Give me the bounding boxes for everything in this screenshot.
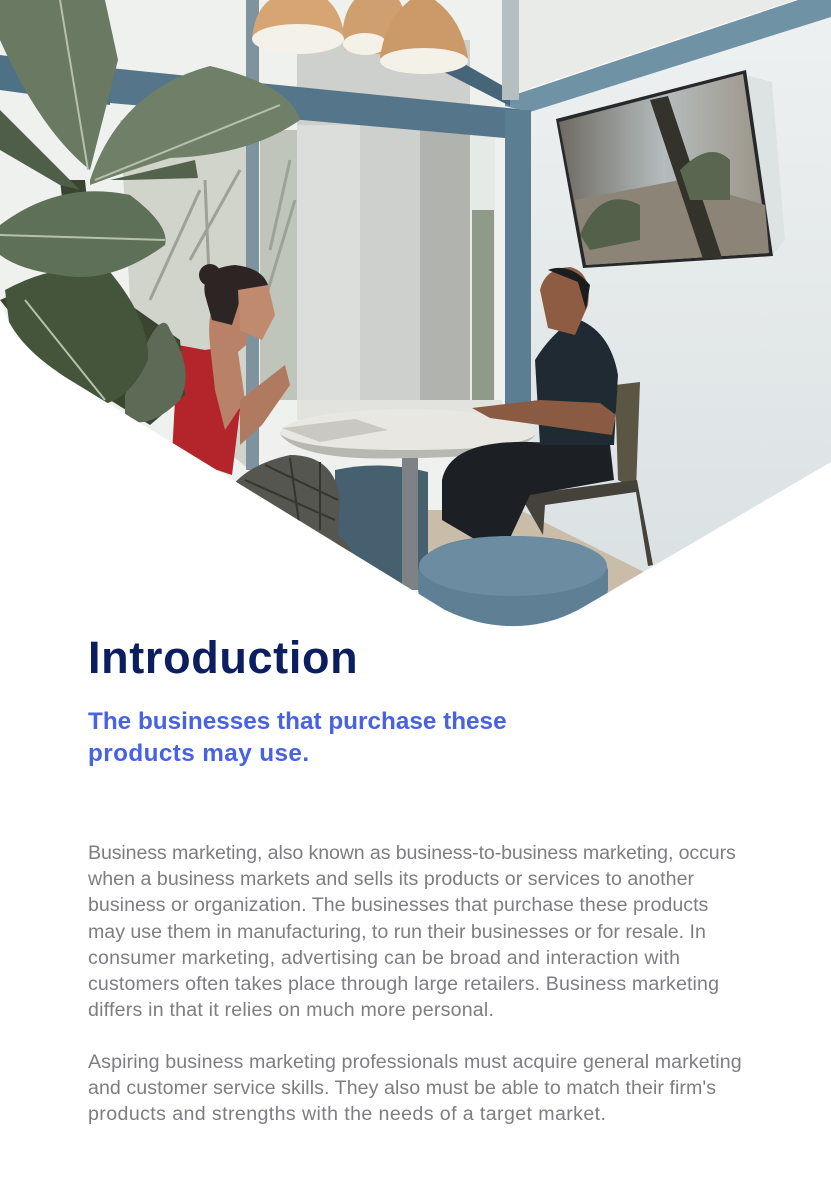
body paragraph 1: customers often takes place through large retailers. Business marketing — [88, 973, 719, 995]
title: Introduction — [88, 632, 358, 683]
TV — [556, 70, 773, 268]
pendant lamps — [252, 0, 468, 74]
concrete pillar — [297, 40, 470, 410]
window beams — [0, 55, 110, 105]
fiddle leaf plant — [0, 0, 300, 425]
man — [442, 267, 653, 566]
subtitle — [88, 708, 507, 767]
body paragraph 1: Business marketing, also known as business-to-business marketing, occurs — [88, 842, 736, 864]
subtitle: products may use. — [88, 740, 310, 767]
photo: meeting in a bright office — [0, 0, 831, 626]
body paragraph 1: may use them in manufacturing, to run their businesses or for resale. In — [88, 921, 706, 943]
body paragraph 1: differs in that it relies on much more personal. — [88, 999, 494, 1021]
body paragraph 1: consumer marketing, advertising can be broad and interaction with — [88, 947, 680, 969]
subtitle: The businesses that purchase these — [88, 708, 507, 735]
woman — [172, 264, 352, 556]
body paragraph 1: when a business markets and sells its products or services to another — [88, 868, 694, 890]
body paragraph 2: and customer service skills. They also must be able to match their firm's — [88, 1077, 716, 1099]
body paragraph 1: business or organization. The businesses that purchase these products — [88, 894, 708, 916]
body paragraph 2: Aspiring business marketing professionals must acquire general marketing — [88, 1051, 742, 1073]
floor — [428, 510, 644, 600]
body paragraph 2: products and strengths with the needs of a target market. — [88, 1103, 606, 1125]
back stool — [335, 465, 428, 590]
body paragraph 2 — [88, 1051, 742, 1125]
window background — [0, 0, 530, 640]
right wall — [522, 17, 831, 625]
table — [280, 409, 536, 590]
body paragraph 1 — [88, 842, 736, 1021]
front stool — [418, 536, 608, 626]
